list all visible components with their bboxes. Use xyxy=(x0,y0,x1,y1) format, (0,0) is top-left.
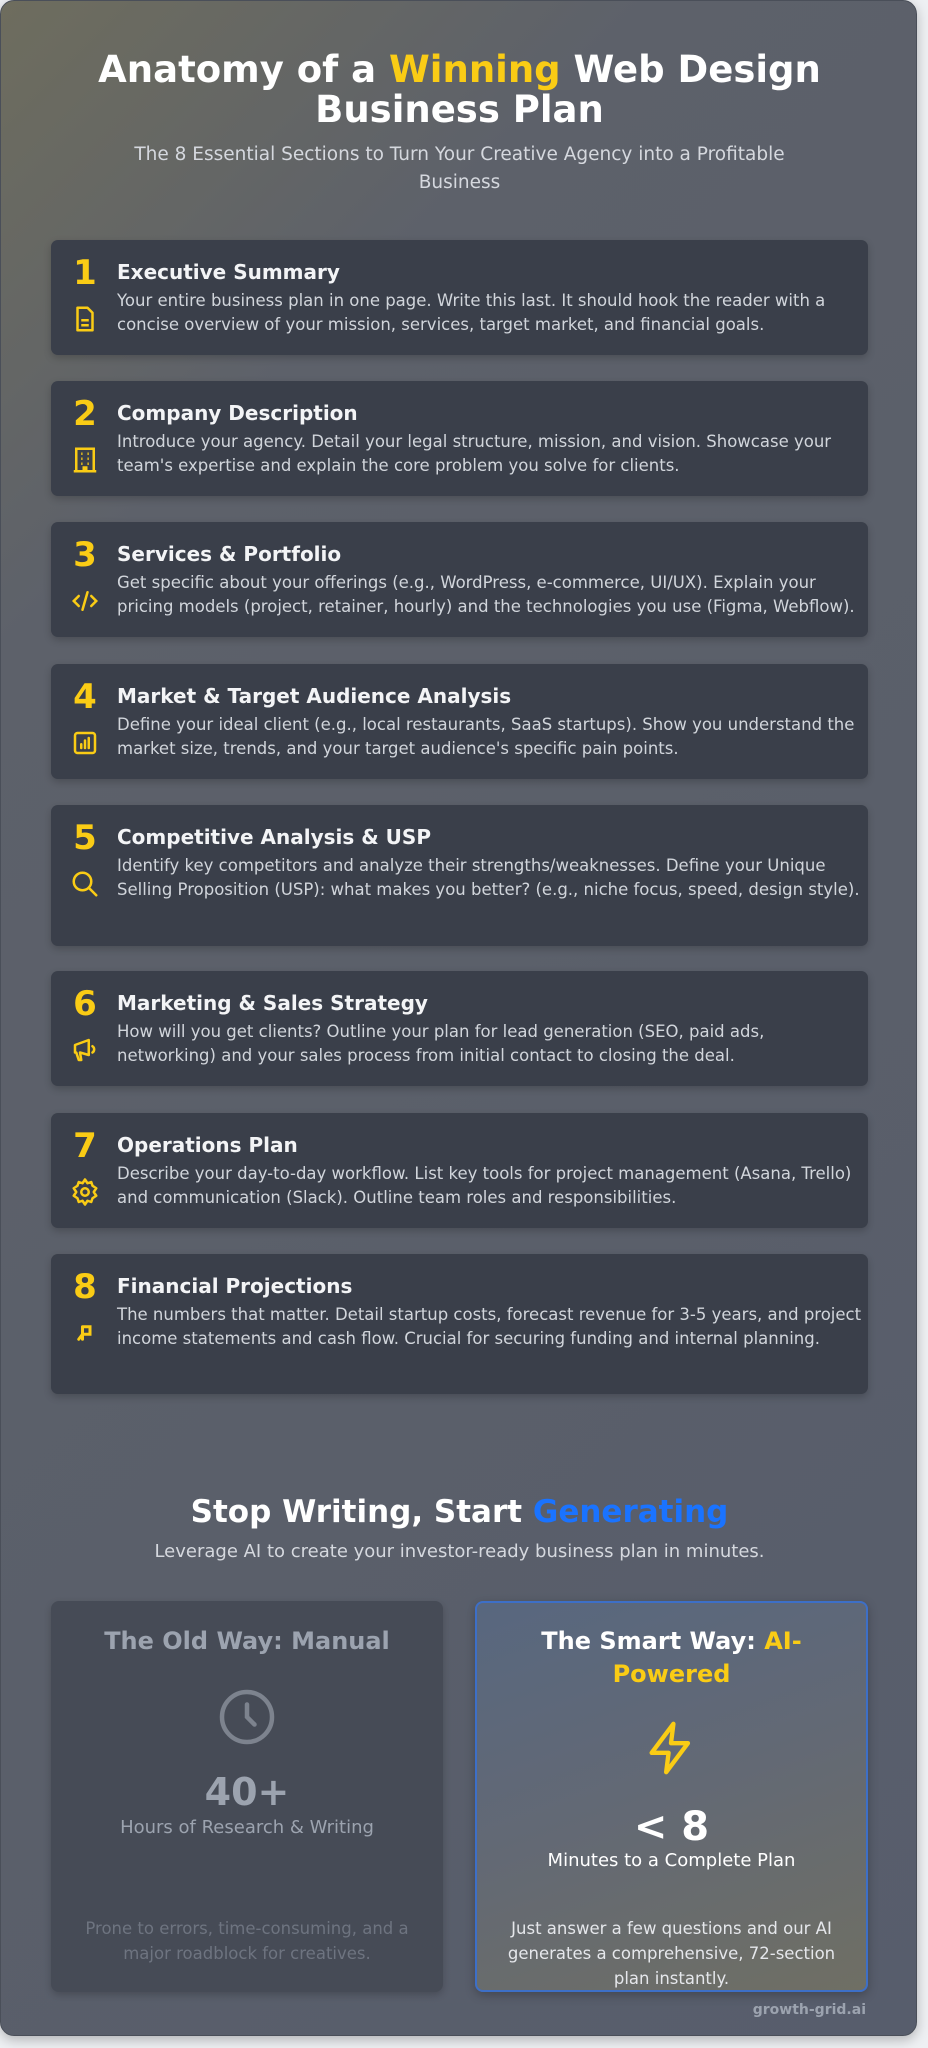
panel: old way: 40+ xyxy=(205,1770,289,1814)
panel: old way: The Old Way: Manual xyxy=(104,1627,390,1655)
card 8: financial xyxy=(51,1254,868,1394)
panel: old way: Hours of Research & Writing xyxy=(120,1817,374,1838)
panel: old way: Prone to errors, time-consuming, and a major roadblock for creatives. xyxy=(85,1919,409,1963)
panel: smart way: Minutes to a Complete Plan xyxy=(548,1850,795,1871)
card 7: operations: Operations Plan xyxy=(117,1133,298,1157)
icon: chart xyxy=(74,732,96,754)
panel: smart way xyxy=(475,1601,868,1992)
panel: smart way: Powered xyxy=(613,1660,730,1688)
card 3: services: 3 xyxy=(73,535,97,575)
card 3: services: Get specific about your offerings (e.g., WordPress, e-commerce, UI/UX). Explain your pricing models (project, retainer, hourly) and the technologies you use (Figma, Webflow). xyxy=(117,573,855,616)
subtitle: The 8 Essential Sections to Turn Your Creative Agency into a Profitable Business xyxy=(134,144,785,193)
card 4: market xyxy=(51,664,868,779)
icon: document xyxy=(76,306,94,332)
card 6: marketing: How will you get clients? Outline your plan for lead generation (SEO, paid ads, networking) and your sales process from initial contact to closing the deal. xyxy=(117,1022,764,1065)
card 5: competitive: Competitive Analysis & USP xyxy=(117,825,431,849)
card 1: executive summary xyxy=(51,240,868,355)
card 6: marketing: 6 xyxy=(73,984,97,1024)
icon: code xyxy=(72,591,98,611)
card 1: executive summary: Executive Summary xyxy=(117,260,340,284)
card 2: company description: 2 xyxy=(73,394,97,434)
card 7: operations: 7 xyxy=(73,1126,97,1166)
card 5: competitive: Identify key competitors and analyze their strengths/weaknesses. Define your Unique Selling Proposition (USP): what makes you better? (e.g., niche focus, speed, design style). xyxy=(117,856,860,899)
card 7: operations: Describe your day-to-day workflow. List key tools for project management (Asana, Trello) and communication (Slack). Outline team roles and responsibilities. xyxy=(117,1164,851,1207)
card 7: operations xyxy=(51,1113,868,1228)
panel: old way xyxy=(51,1601,443,1992)
card 2: company description: Introduce your agency. Detail your legal structure, mission, and vision. Showcase your team's expertise and explain the core problem you solve for clients. xyxy=(117,432,831,475)
card 6: marketing: Marketing & Sales Strategy xyxy=(117,991,428,1015)
card 5: competitive: 5 xyxy=(73,818,97,858)
icon: clock xyxy=(220,1690,274,1744)
icon: building xyxy=(74,448,96,472)
title: Business Plan xyxy=(315,88,604,131)
icon: megaphone xyxy=(74,1038,96,1062)
card 4: market: 4 xyxy=(73,677,97,717)
card 4: market: Define your ideal client (e.g., local restaurants, SaaS startups). Show you understand the market size, trends, and your target audience's specific pain points. xyxy=(117,715,854,758)
footer: brand: growth-grid.ai xyxy=(753,2002,866,2018)
card 3: services: Services & Portfolio xyxy=(117,542,341,566)
heading: stop writing: Stop Writing, Start Generating xyxy=(191,1494,728,1530)
card 4: market: Market & Target Audience Analysis xyxy=(117,684,511,708)
panel: smart way: Just answer a few questions and our AI generates a comprehensive, 72-section plan instantly. xyxy=(508,1919,835,1988)
card 2: company description: Company Description xyxy=(117,401,358,425)
icon: finance xyxy=(77,1325,92,1341)
card 8: financial: 8 xyxy=(73,1267,97,1307)
card 5: competitive xyxy=(51,805,868,946)
card 1: executive summary: Your entire business plan in one page. Write this last. It should hook the reader with a concise overview of your mission, services, target market, and financial goals. xyxy=(117,291,825,334)
card 2: company description xyxy=(51,381,868,496)
title xyxy=(98,48,821,131)
card 1: executive summary: 1 xyxy=(73,253,97,293)
panel: smart way: The Smart Way: AI- xyxy=(541,1627,802,1655)
panel: smart way: < 8 xyxy=(634,1804,709,1850)
card 8: financial: The numbers that matter. Detail startup costs, forecast revenue for 3-5 years, and project income statements and cash flow. Crucial for securing funding and internal planning. xyxy=(117,1305,861,1348)
card 8: financial: Financial Projections xyxy=(117,1274,352,1298)
icon: search xyxy=(72,872,98,897)
card 3: services xyxy=(51,522,868,637)
card 6: marketing xyxy=(51,971,868,1086)
icon: lightning xyxy=(650,1722,690,1774)
icon: gear xyxy=(72,1178,98,1206)
subheading: Leverage AI to create your investor-ready business plan in minutes. xyxy=(154,1541,765,1562)
title: Anatomy of a Winning Web Design xyxy=(98,48,821,91)
